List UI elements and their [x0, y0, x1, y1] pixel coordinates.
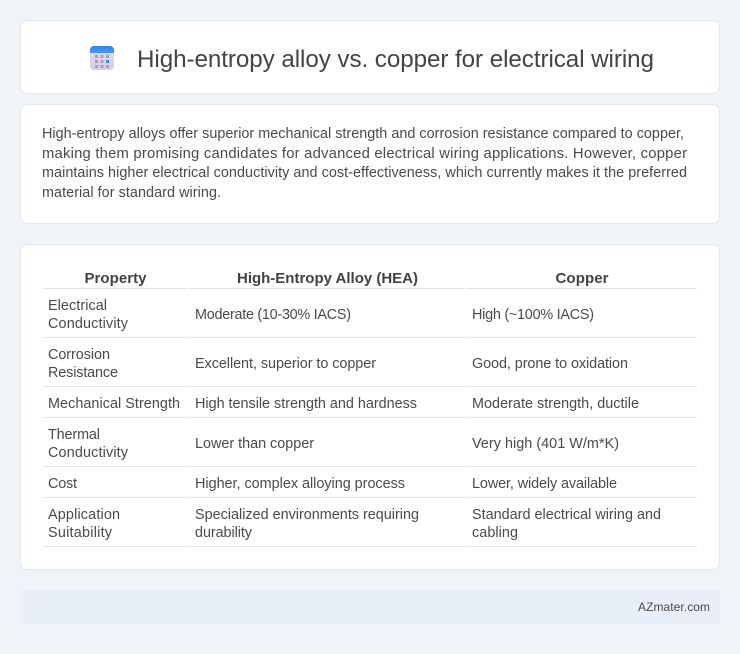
intro text: making them promising candidates for advanced electrical wiring applications. However, copper [42, 146, 687, 162]
row: application suitability [48, 507, 661, 541]
row: mechanical strength [48, 396, 639, 412]
row: application suitability: Standard electrical wiring and [472, 507, 661, 523]
table header [84, 270, 609, 287]
table header: Copper [556, 270, 609, 287]
panel: comparison table [20, 244, 720, 570]
row: electrical conductivity: High (~100% IACS) [472, 307, 594, 323]
row: cost: Higher, complex alloying process [195, 476, 405, 492]
row: application suitability: cabling [472, 525, 518, 541]
row: application suitability: durability [195, 525, 253, 541]
row: corrosion resistance: Good, prone to oxidation [472, 356, 628, 372]
panel: introduction [20, 104, 720, 224]
row: corrosion resistance: Corrosion [48, 347, 110, 363]
panel: title card [20, 20, 720, 94]
intro text: High-entropy alloys offer superior mechanical strength and corrosion resistance compared to copper, [42, 126, 684, 142]
row: corrosion resistance [48, 347, 628, 381]
row: mechanical strength: Mechanical Strength [48, 396, 180, 412]
row: thermal conductivity [48, 427, 619, 461]
row: thermal conductivity: Conductivity [48, 445, 129, 461]
row: cost: Cost [48, 476, 77, 492]
icon: calendar [90, 46, 114, 70]
row: electrical conductivity: Moderate (10-30% IACS) [195, 307, 351, 323]
intro text [42, 126, 687, 201]
title: High-entropy alloy vs. copper for electrical wiring [137, 46, 654, 73]
row: application suitability: Specialized environments requiring [195, 507, 419, 523]
row: electrical conductivity [48, 298, 594, 332]
row: application suitability: Suitability [48, 525, 113, 541]
intro text: material for standard wiring. [42, 185, 221, 201]
table grid lines [43, 288, 697, 547]
intro text: maintains higher electrical conductivity and cost-effectiveness, which currently makes it the preferred [42, 165, 687, 181]
row: electrical conductivity: Electrical [48, 298, 107, 314]
row: cost [48, 476, 617, 492]
row: application suitability: Application [48, 507, 120, 523]
row: thermal conductivity: Very high (401 W/m*K) [472, 436, 619, 452]
row: mechanical strength: Moderate strength, ductile [472, 396, 639, 412]
footer credit: AZmater.com [638, 600, 710, 614]
row: corrosion resistance: Resistance [48, 365, 118, 381]
footer bar [20, 590, 720, 624]
row: thermal conductivity: Thermal [48, 427, 100, 443]
row: mechanical strength: High tensile strength and hardness [195, 396, 417, 412]
row: thermal conductivity: Lower than copper [195, 436, 314, 452]
row: corrosion resistance: Excellent, superior to copper [195, 356, 376, 372]
table header: Property [84, 270, 147, 287]
row: cost: Lower, widely available [472, 476, 617, 492]
row: electrical conductivity: Conductivity [48, 316, 129, 332]
table header: High-Entropy Alloy (HEA) [237, 270, 418, 287]
